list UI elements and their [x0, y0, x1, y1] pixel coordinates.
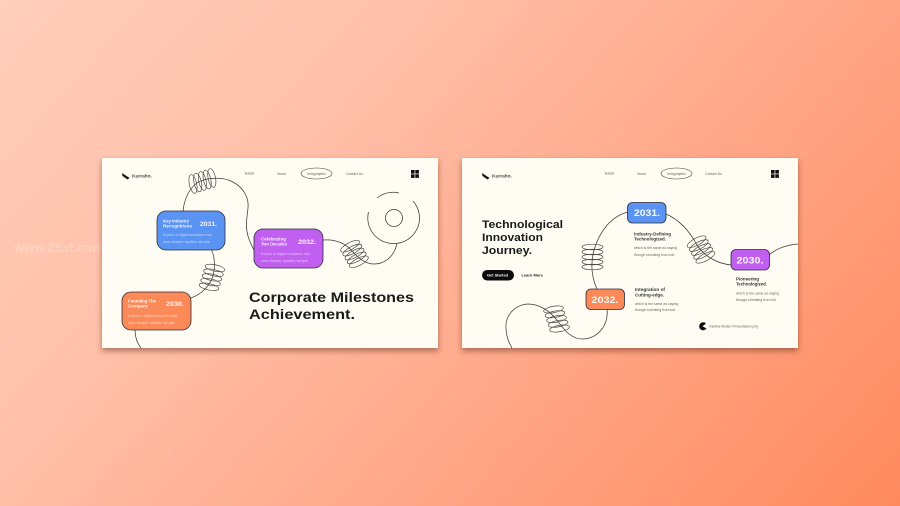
card: 2032 purple: Explore or digital ecosystem may [261, 252, 310, 256]
icon: spring coil bottom [543, 305, 570, 333]
panel: technological innovation slide [462, 158, 798, 348]
card: 2030 orange [122, 292, 191, 330]
button: learn more: Learn More [522, 273, 544, 278]
card: 2031 blue: Key Industry [163, 218, 190, 224]
logo: Kurraho. [492, 174, 512, 178]
heading: Journey. [482, 245, 532, 257]
heading: Innovation [482, 232, 543, 244]
navigation: Contact Us [705, 172, 722, 176]
card: 2031 blue: 2031. [200, 221, 217, 228]
badge: 2030 purple [731, 250, 770, 270]
icon: grid menu [771, 170, 779, 178]
text block: pioneering: Pioneering [736, 276, 759, 282]
icon: spring coil right [339, 238, 370, 270]
text block: pioneering [736, 276, 779, 302]
connector line: orange loop [506, 304, 607, 348]
slide background [462, 158, 798, 348]
navigation: Infographic [667, 172, 686, 176]
logo [122, 173, 152, 180]
connector line: orange to bottom [135, 330, 141, 348]
text block: industry-defining: which is the same as saying [634, 246, 677, 250]
navigation: Home [277, 172, 286, 176]
card: 2030 orange: Founding The [128, 298, 157, 304]
icon: spring coil middle [199, 263, 225, 292]
heading: Achievement. [249, 307, 355, 322]
card: 2032 purple: 2032. [298, 239, 316, 246]
badge: 2032 orange: 2032. [592, 295, 618, 305]
card: 2030 orange: Company [128, 304, 149, 308]
connector line: purple to edge [769, 244, 798, 255]
watermark: www.25xt.com [13, 241, 104, 255]
card: 2032 purple: own deeper system simple [261, 259, 308, 263]
card: 2031 blue: own deeper system simple [163, 240, 210, 244]
connector line: blue to orange [191, 249, 214, 298]
text block: industry-defining [634, 232, 677, 257]
badge: 2031 blue: 2031. [634, 208, 660, 218]
text block: pioneering: Technologized. [736, 282, 767, 286]
card: 2030 orange: 2030. [166, 301, 184, 308]
text block: integration: which is the same as saying [635, 302, 678, 306]
navigation: Contact Us [346, 172, 363, 176]
text block: industry-defining: Industry-Defining [634, 232, 671, 236]
text block: pioneering: which is the same as saying [736, 292, 779, 296]
text block: integration: though shrinking from toil. [635, 308, 676, 312]
icon: concentric rings [368, 192, 419, 244]
heading [482, 219, 563, 257]
connector line: blue to purple [183, 178, 256, 254]
card: 2031 blue: Explore or digital ecosystem may [163, 233, 212, 237]
text block: integration: Integration of [635, 287, 666, 292]
navigation [605, 168, 722, 179]
card: 2032 purple [254, 229, 323, 268]
card: 2031 blue: Recognitions [163, 224, 193, 228]
footer note [699, 322, 758, 330]
connector line: blue to purple [666, 214, 732, 265]
card: 2030 orange: Explore or digital ecosystem may [128, 314, 177, 318]
heading [249, 290, 414, 322]
logo [482, 173, 512, 180]
button: get started: Get Started [487, 273, 509, 278]
heading: Technological [482, 219, 563, 231]
logo: Kurraho. [132, 174, 152, 178]
text block: integration: Cutting-edge. [635, 292, 664, 298]
navigation: Blast [245, 172, 255, 176]
icon: spring coil right [686, 234, 716, 265]
icon: spring coil top [187, 168, 217, 194]
card: 2031 blue [157, 211, 225, 250]
connector line: blue to coil and orange [592, 212, 628, 289]
icon: spring coil left [582, 244, 603, 270]
text block: industry-defining: Technologized. [634, 236, 666, 242]
navigation: Infographic [307, 172, 326, 176]
card: 2032 purple: Two Decades [261, 242, 288, 246]
text block: integration [635, 287, 678, 312]
navigation: Home [637, 172, 646, 176]
connector line: purple to rings [323, 240, 397, 264]
panel: corporate milestones slide [102, 158, 438, 348]
footer note: Inentive Modern Presentation.png [709, 324, 758, 328]
badge: 2032 orange [586, 289, 624, 310]
card: 2032 purple: Celebrating [261, 236, 286, 242]
icon: grid menu [411, 170, 419, 178]
navigation: Blast [605, 172, 615, 176]
navigation [245, 168, 363, 179]
card: 2030 orange: own deeper system simple [128, 321, 175, 325]
badge: 2031 blue [628, 202, 666, 223]
text block: industry-defining: though shrinking from toil. [634, 253, 675, 257]
button: get started [482, 270, 514, 280]
badge: 2030 purple: 2030. [736, 256, 764, 266]
text block: pioneering: though shrinking from toil. [736, 298, 777, 302]
heading: Corporate Milestones [249, 290, 414, 305]
slide background [102, 158, 438, 348]
